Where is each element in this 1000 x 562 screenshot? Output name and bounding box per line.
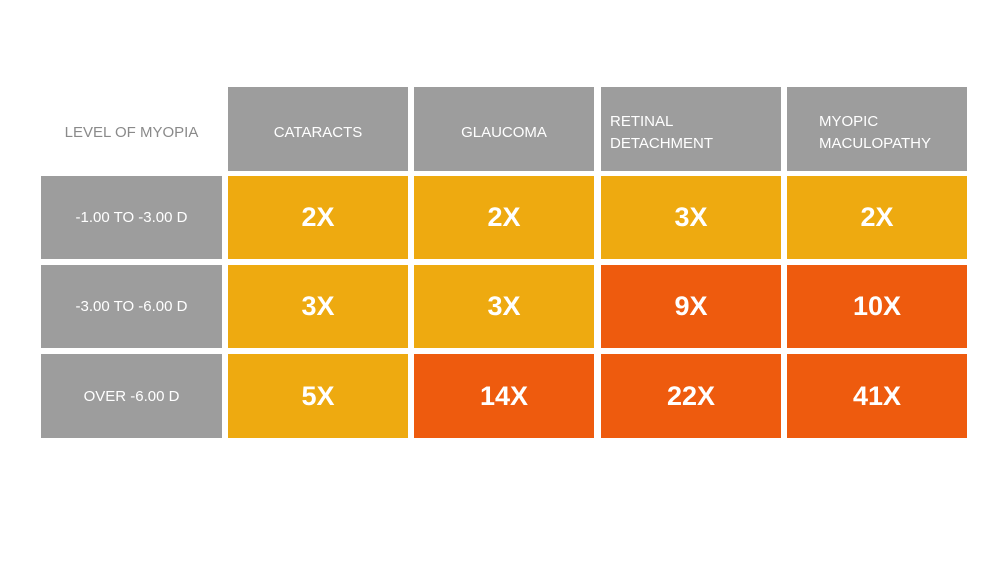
cell: glaucoma row2: [414, 265, 594, 348]
row label: -1.00 to -3.00 D: -1.00 TO -3.00 D: [75, 209, 188, 226]
cell: cataracts row2: [228, 265, 408, 348]
cell: retinal row2: 9X: [674, 291, 708, 321]
cell: cataracts row2: 3X: [301, 291, 335, 321]
cell: cataracts row3: 5X: [301, 380, 335, 410]
header: retinal detachment: [601, 87, 781, 171]
header: glaucoma: GLAUCOMA: [461, 124, 547, 140]
header: cataracts: CATARACTS: [274, 124, 362, 140]
row label: -1.00 to -3.00 D: [41, 176, 222, 259]
row label: -3.00 to -6.00 D: -3.00 TO -6.00 D: [75, 298, 188, 315]
header: level of myopia: LEVEL OF MYOPIA: [65, 124, 198, 140]
cell: retinal row3: [601, 354, 781, 438]
row label: over -6.00 D: OVER -6.00 D: [84, 388, 179, 404]
cell: cataracts row1: [228, 176, 408, 259]
cell: maculopathy row1: [787, 176, 967, 259]
cell: retinal row2: [601, 265, 781, 348]
cell: glaucoma row2: 3X: [487, 291, 521, 321]
cell: maculopathy row2: 10X: [853, 291, 901, 321]
header: myopic maculopathy: MYOPIC: [819, 113, 878, 130]
cell: cataracts row1: 2X: [301, 202, 335, 232]
cell: retinal row3: 22X: [667, 380, 715, 410]
header: retinal detachment: RETINAL: [610, 113, 673, 130]
cell: maculopathy row1: 2X: [860, 202, 894, 232]
header: myopic maculopathy: MACULOPATHY: [819, 135, 931, 152]
header: retinal detachment: DETACHMENT: [610, 135, 713, 152]
cell: maculopathy row3: [787, 354, 967, 438]
cell: cataracts row3: [228, 354, 408, 438]
cell: glaucoma row3: [414, 354, 594, 438]
cell: retinal row1: [601, 176, 781, 259]
header: cataracts: [228, 87, 408, 171]
cell: glaucoma row1: 2X: [487, 202, 521, 232]
cell: glaucoma row3: 14X: [480, 380, 528, 410]
header: myopic maculopathy: [787, 87, 967, 171]
row label: -3.00 to -6.00 D: [41, 265, 222, 348]
cell: glaucoma row1: [414, 176, 594, 259]
cell: maculopathy row2: [787, 265, 967, 348]
row label: over -6.00 D: [41, 354, 222, 438]
header: glaucoma: [414, 87, 594, 171]
cell: retinal row1: 3X: [674, 202, 708, 232]
cell: maculopathy row3: 41X: [853, 380, 901, 410]
